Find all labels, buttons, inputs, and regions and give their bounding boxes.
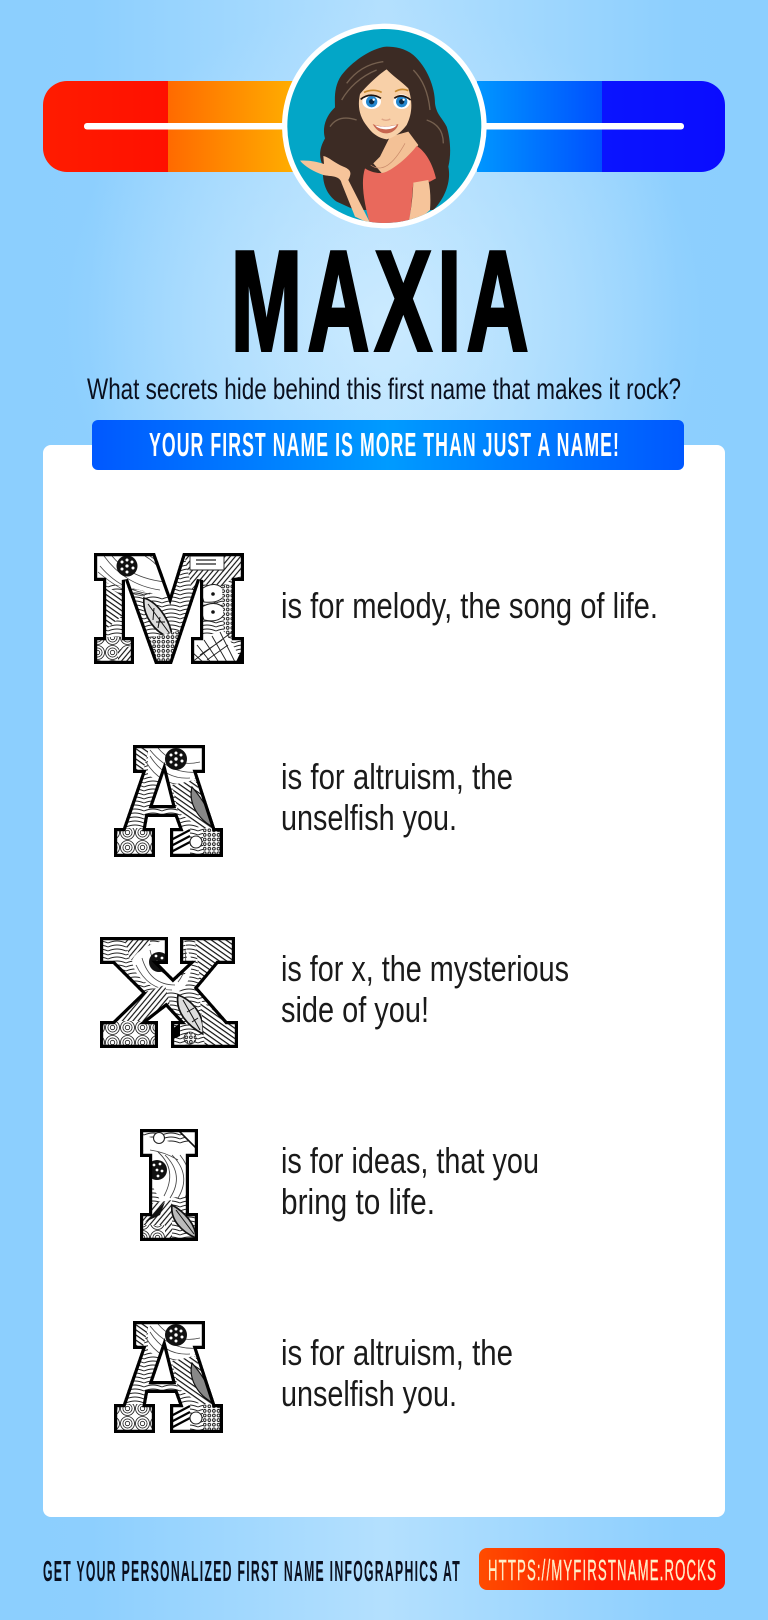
letter X row [100,937,569,1049]
header color bar [43,81,725,172]
footer url button [479,1548,725,1590]
title: MAXIA [231,221,534,380]
text: X meaning: is for x, the mysterious [281,948,569,989]
text: I meaning: is for ideas, that you [281,1140,539,1181]
text: A meaning: unselfish you. [281,797,457,838]
icon: doodle letter A [114,1321,224,1433]
text: A meaning: is for altruism, the [281,756,513,797]
icon: doodle letter X [100,937,239,1049]
text: second A meaning: unselfish you. [281,1373,457,1414]
banner [92,420,684,470]
icon: doodle letter A [114,745,224,857]
letter M row [94,553,658,664]
text: I meaning: bring to life. [281,1181,435,1222]
second letter A row [114,1321,513,1433]
avatar portrait: woman in red top [282,24,487,228]
text: second A meaning: is for altruism, the [281,1332,513,1373]
icon: doodle letter I [140,1129,199,1241]
panel: letters [43,445,725,1517]
letter A row [114,745,513,857]
footer [43,1548,725,1590]
letter I row [140,1129,539,1241]
icon: doodle letter M [94,553,244,664]
text: M meaning: is for melody, the song of life. [281,585,658,626]
text: X meaning: side of you! [281,989,429,1030]
